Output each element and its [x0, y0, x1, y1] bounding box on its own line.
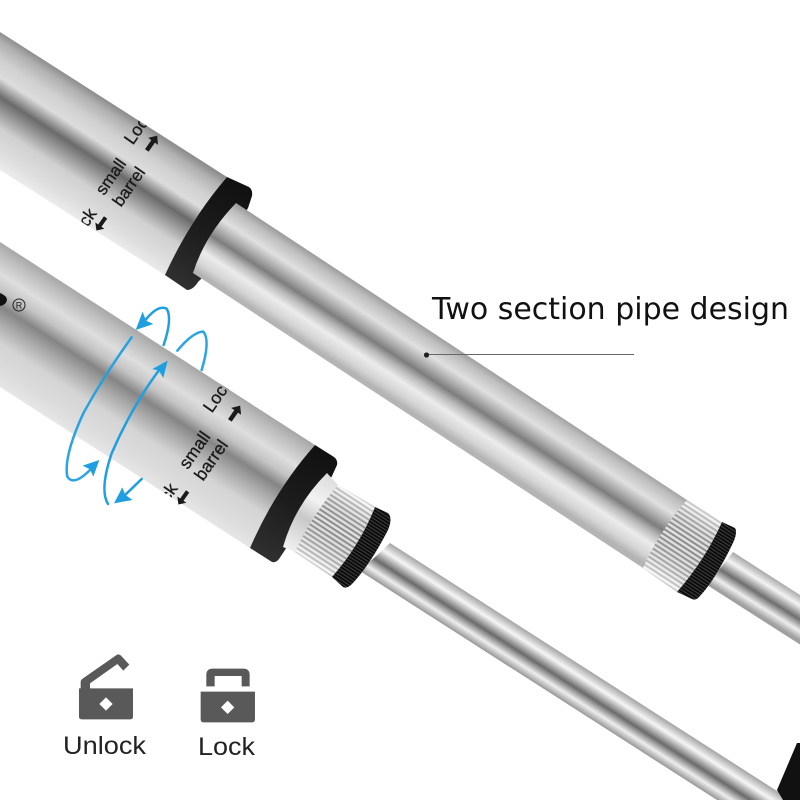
barrel label: small barrel: barrel [109, 164, 149, 210]
back arc upper right [177, 332, 207, 370]
front arc right [104, 365, 163, 504]
front arc left [67, 337, 132, 480]
arrowhead right bottom [114, 487, 133, 503]
logo fragment [0, 293, 7, 306]
barrel label: small barrel [175, 428, 232, 484]
barrel label: unlock cut off: Unlock [53, 204, 101, 260]
registered mark: R [16, 300, 23, 310]
title: two section pipe design: Two section pipe design [431, 292, 789, 327]
top barrel [0, 32, 227, 275]
arrow: lock direction [225, 402, 245, 424]
barrel label: lock: Lock [120, 106, 157, 148]
lower knurled black cap [332, 507, 390, 588]
barrel label: small barrel: small [92, 155, 130, 198]
lower barrel [0, 242, 315, 548]
lower collar and knurled grip [283, 473, 390, 588]
lower rod [360, 543, 791, 800]
back arc upper left [143, 308, 169, 345]
lower black ring [250, 445, 337, 562]
barrel label: small barrel [92, 155, 149, 210]
barrel label: lock: Lock [199, 374, 236, 416]
icon: locked padlock [201, 669, 255, 722]
arrow: unlock direction [92, 214, 110, 234]
black foot at bottom right [777, 743, 800, 800]
rotation arrows [67, 308, 207, 504]
arrowhead left top [136, 312, 153, 330]
barrel label: small barrel: small [175, 428, 214, 472]
arrow: lock direction [142, 132, 162, 154]
label: unlock: Unlock [63, 732, 147, 760]
barrel label: small barrel: barrel [190, 436, 232, 484]
back arc lower right [123, 479, 142, 497]
leader line [424, 352, 634, 358]
middle section pipe with rod [193, 203, 800, 644]
arrowhead left bottom [83, 460, 99, 477]
barrel label: unlock cut off: Unlock [134, 479, 182, 535]
icon: unlocked padlock [79, 654, 133, 719]
arrow: unlock direction [174, 488, 192, 508]
arrowhead right top [152, 361, 168, 378]
registered mark [13, 299, 25, 311]
top black ring [165, 177, 252, 290]
label: lock: Lock [198, 733, 256, 761]
